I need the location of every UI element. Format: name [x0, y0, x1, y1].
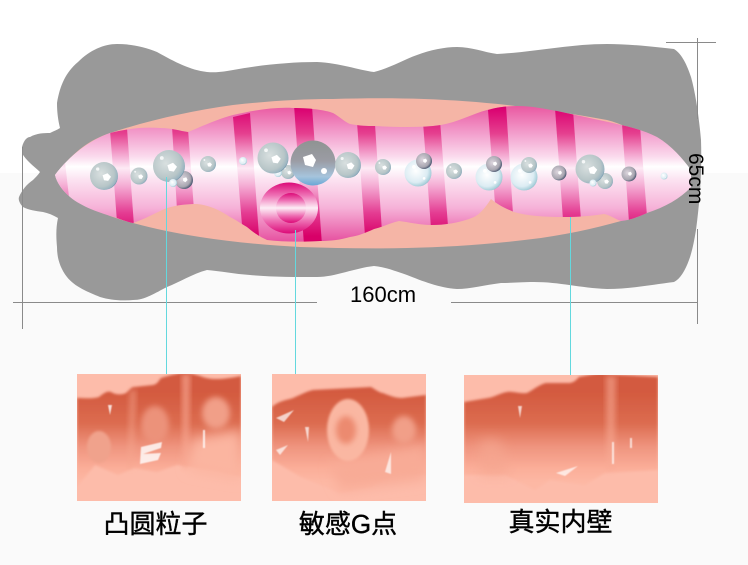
teal callout lines	[166, 177, 570, 375]
peach inner cavity	[55, 98, 691, 248]
caption: raised beads: 凸圆粒子	[103, 509, 208, 539]
sensitive point target circles	[260, 182, 318, 234]
product diagram	[19, 44, 701, 300]
photo: sensitive point	[272, 374, 426, 501]
gray product silhouette	[19, 44, 701, 300]
photo: raised round beads	[77, 372, 241, 501]
caption: sensitive point: 敏感G点	[299, 509, 397, 539]
caption: inner wall: 真实内壁	[508, 507, 613, 537]
dimension lines	[13, 38, 716, 329]
width label: 160cm	[350, 282, 416, 307]
pink inner body with stripes	[50, 100, 700, 245]
water bubbles	[90, 140, 668, 190]
height label: 65cm	[684, 153, 707, 204]
photo: realistic inner wall	[464, 373, 658, 503]
